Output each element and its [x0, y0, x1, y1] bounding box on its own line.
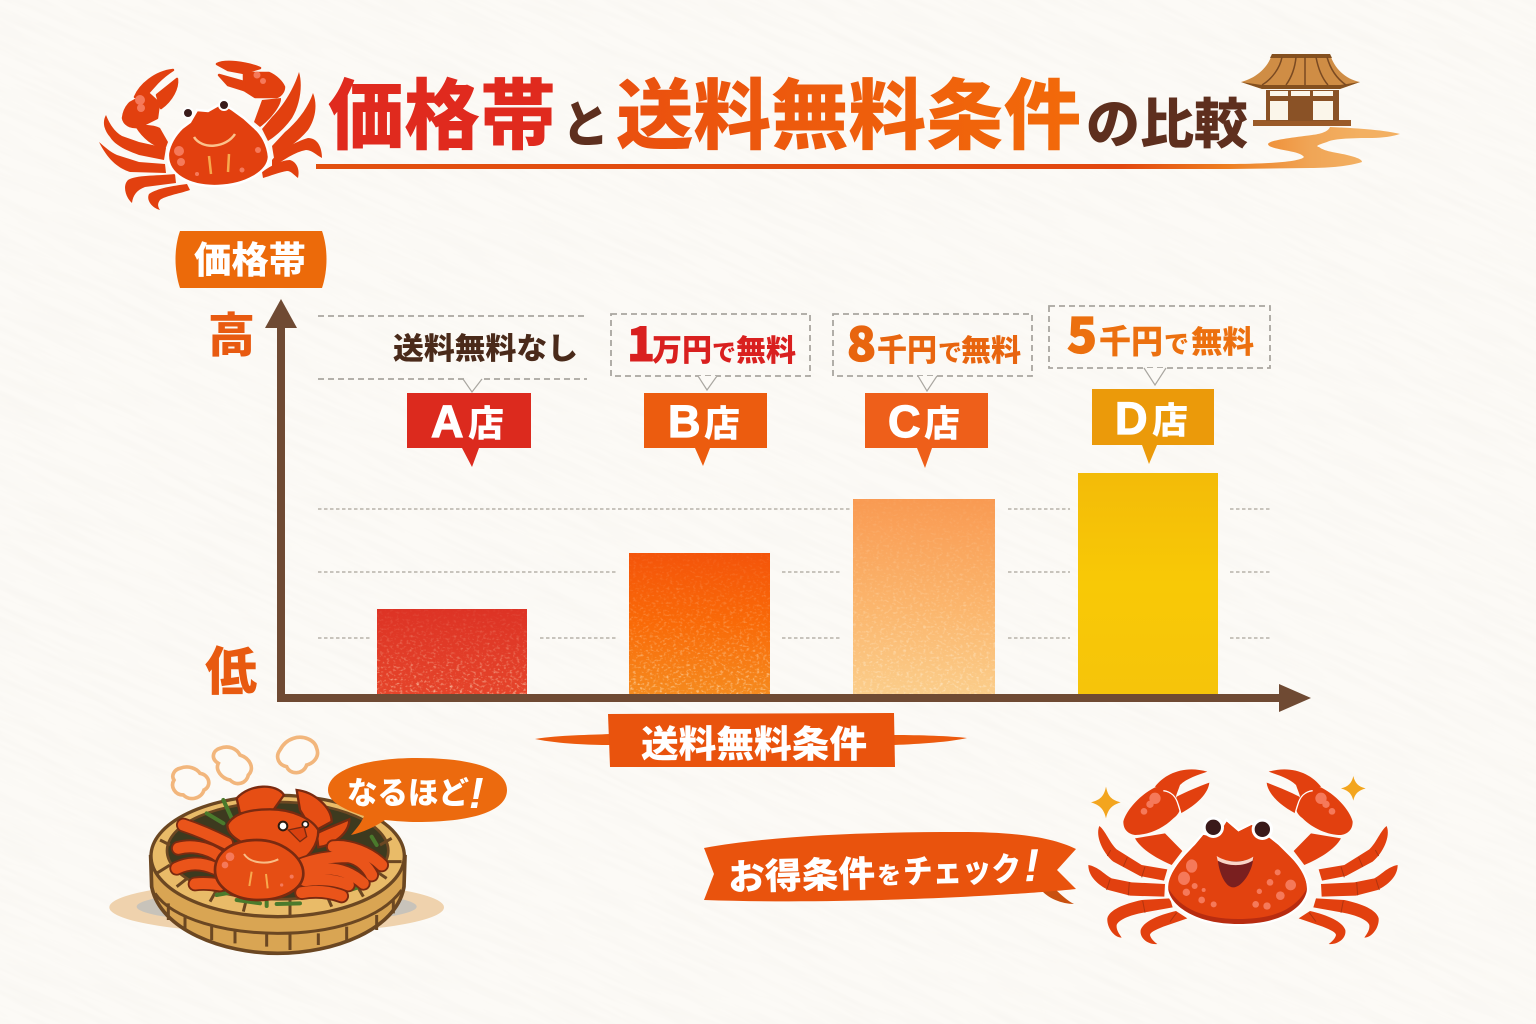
- basket side: [151, 857, 405, 953]
- callout: C店 8千円で無料: 8: [847, 309, 876, 375]
- callout: B店 1万円で無料: 1: [627, 309, 655, 375]
- callout: B店 1万円で無料: [611, 309, 810, 390]
- crab body: [168, 103, 269, 186]
- store tag: C店: 店: [924, 395, 960, 447]
- store tag: A店: A: [431, 396, 464, 447]
- banner: お得条件をチェック: チェック: [902, 842, 1022, 893]
- y axis: [265, 299, 297, 702]
- basket rim: [151, 795, 404, 917]
- sparkle right: [1341, 776, 1366, 801]
- legs left: [1088, 826, 1187, 944]
- store tag: D店: 店: [1152, 392, 1188, 444]
- callout: C店 8千円で無料: で: [938, 333, 962, 368]
- icon: shrine building: [1241, 54, 1360, 126]
- front crab legs: [177, 825, 382, 896]
- gridlines: [318, 509, 1272, 638]
- store tag: C店: C: [888, 396, 920, 447]
- basket greens: [207, 800, 377, 906]
- callout: C店 8千円で無料: [833, 309, 1032, 391]
- banner: お得条件をチェック: [704, 832, 1076, 904]
- callout: A店 送料無料なし: [318, 316, 587, 392]
- x axis: [277, 684, 1311, 712]
- bar: A店: [377, 609, 527, 694]
- callout: D店 5千円で無料: で: [1164, 325, 1189, 361]
- callout: B店 1万円で無料: 万円: [652, 325, 712, 370]
- callout: D店 5千円で無料: 千円: [1099, 315, 1163, 363]
- x axis title ribbon: 送料無料条件: [641, 714, 867, 768]
- store tag: D店: [1092, 389, 1214, 464]
- store tag: B店: [644, 393, 767, 466]
- store tag: B店: 店: [704, 395, 740, 447]
- title: [328, 55, 1248, 166]
- basket shadow: [109, 881, 444, 933]
- crab claws: [123, 62, 284, 127]
- store tag: D店: D: [1115, 393, 1148, 444]
- crab mouth: [1218, 857, 1253, 887]
- y axis high label: 高: [208, 297, 255, 366]
- front crab body: [215, 840, 303, 900]
- illustration: smiling crab with sparkles: [1088, 769, 1398, 944]
- callout: C店 8千円で無料: 千円: [877, 325, 937, 370]
- bar: D店: [1078, 473, 1218, 694]
- crab claw spots: [135, 72, 266, 112]
- crab eyes: [1203, 817, 1224, 838]
- crab legs: [99, 72, 322, 210]
- bar: C店: [853, 499, 995, 694]
- x axis title ribbon: [535, 713, 967, 768]
- callout: D店 5千円で無料: 5: [1067, 297, 1097, 367]
- store tag: A店: [407, 393, 531, 467]
- icon: title crab: [99, 62, 322, 210]
- banner: お得条件をチェック: !: [1023, 839, 1040, 891]
- steam clouds: [173, 737, 318, 799]
- y axis title: 価格帯: [176, 230, 326, 288]
- y axis low label: 低: [205, 630, 257, 705]
- illustration: crab in basket: [109, 737, 444, 953]
- callout: D店 5千円で無料: 無料: [1191, 317, 1254, 362]
- crab body: [1168, 822, 1307, 924]
- back crab: [227, 787, 349, 863]
- speech bubble: なるほど: !: [469, 769, 484, 818]
- title underline and sand path: [316, 127, 1400, 169]
- store tag: C店: [865, 393, 988, 468]
- sparkle left: [1091, 787, 1121, 818]
- claw left: [1123, 769, 1209, 865]
- callout: C店 8千円で無料: 無料: [961, 326, 1021, 370]
- speech bubble: なるほど: なるほど: [347, 768, 469, 813]
- title text: の比較: の比較: [1086, 80, 1248, 159]
- claw right: [1267, 769, 1353, 865]
- store tag: B店: B: [668, 396, 700, 447]
- legs right: [1299, 826, 1398, 944]
- bar: B店: [629, 553, 770, 694]
- callout: B店 1万円で無料: で: [712, 333, 736, 368]
- banner: お得条件をチェック: お得条件: [727, 845, 876, 901]
- speech bubble: なるほど: [328, 758, 507, 835]
- banner: お得条件をチェック: を: [877, 855, 902, 891]
- y axis title: 価格帯: 価格帯: [194, 230, 306, 284]
- title text: 送料無料条件: 送料無料条件: [616, 55, 1081, 166]
- callout: D店 5千円で無料: [1049, 297, 1270, 385]
- callout: A店 送料無料なし: 送料無料なし: [393, 324, 578, 368]
- title text: 価格帯: 価格帯: [328, 55, 556, 166]
- store tag: A店: 店: [468, 395, 504, 447]
- callout: B店 1万円で無料: 無料: [736, 326, 796, 370]
- crab spots: [1178, 859, 1296, 910]
- title text: と: と: [562, 85, 609, 157]
